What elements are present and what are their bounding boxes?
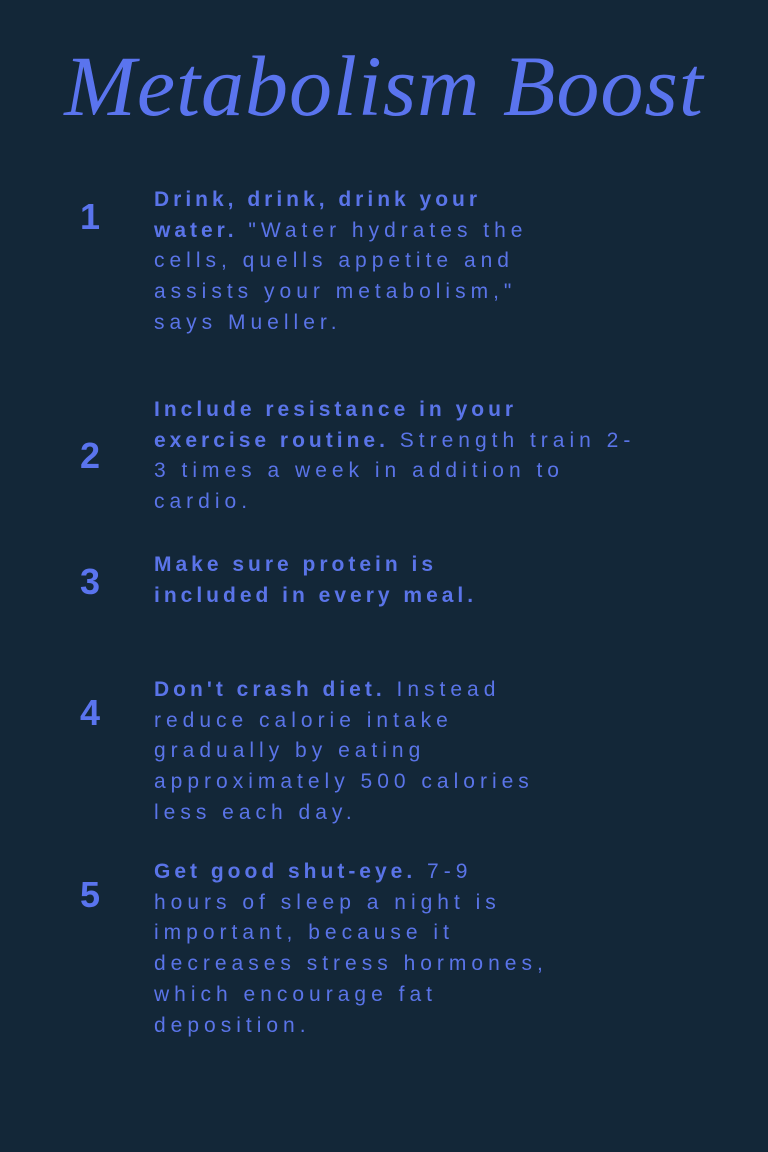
text 4 [154, 678, 534, 824]
text 4: gradually by eating [154, 739, 425, 762]
text 4: approximately 500 calories [154, 770, 534, 793]
text 1: cells, quells appetite and [154, 249, 514, 272]
text 1: assists your metabolism," [154, 280, 516, 303]
text 1: Drink, drink, drink your [154, 188, 481, 211]
text 1: says Mueller. [154, 311, 342, 334]
text 1: water. "Water hydrates the [154, 219, 527, 242]
text 2: 3 times a week in addition to [154, 459, 564, 482]
text 5: hours of sleep a night is [154, 891, 501, 914]
text 2 [154, 398, 635, 513]
number 4: 4 [80, 692, 100, 733]
text 5 [154, 860, 548, 1037]
title: Metabolism Boost [64, 38, 704, 134]
text 4: reduce calorie intake [154, 709, 453, 732]
text 5: deposition. [154, 1014, 311, 1037]
number 2: 2 [80, 435, 100, 476]
text 2: Include resistance in your [154, 398, 517, 421]
text 3: included in every meal. [154, 584, 477, 607]
text 3: Make sure protein is [154, 553, 437, 576]
text 5: important, because it [154, 921, 454, 944]
number 1: 1 [80, 196, 100, 237]
text 4: less each day. [154, 801, 357, 824]
text 2: exercise routine. Strength train 2- [154, 429, 635, 452]
text 4: Don't crash diet. Instead [154, 678, 500, 701]
text 5: decreases stress hormones, [154, 952, 548, 975]
text 5: which encourage fat [154, 983, 437, 1006]
text 3 [154, 553, 477, 607]
text 1 [154, 188, 527, 334]
text 2: cardio. [154, 490, 252, 513]
number 3: 3 [80, 561, 100, 602]
text 5: Get good shut-eye. 7-9 [154, 860, 472, 883]
number 5: 5 [80, 874, 100, 915]
